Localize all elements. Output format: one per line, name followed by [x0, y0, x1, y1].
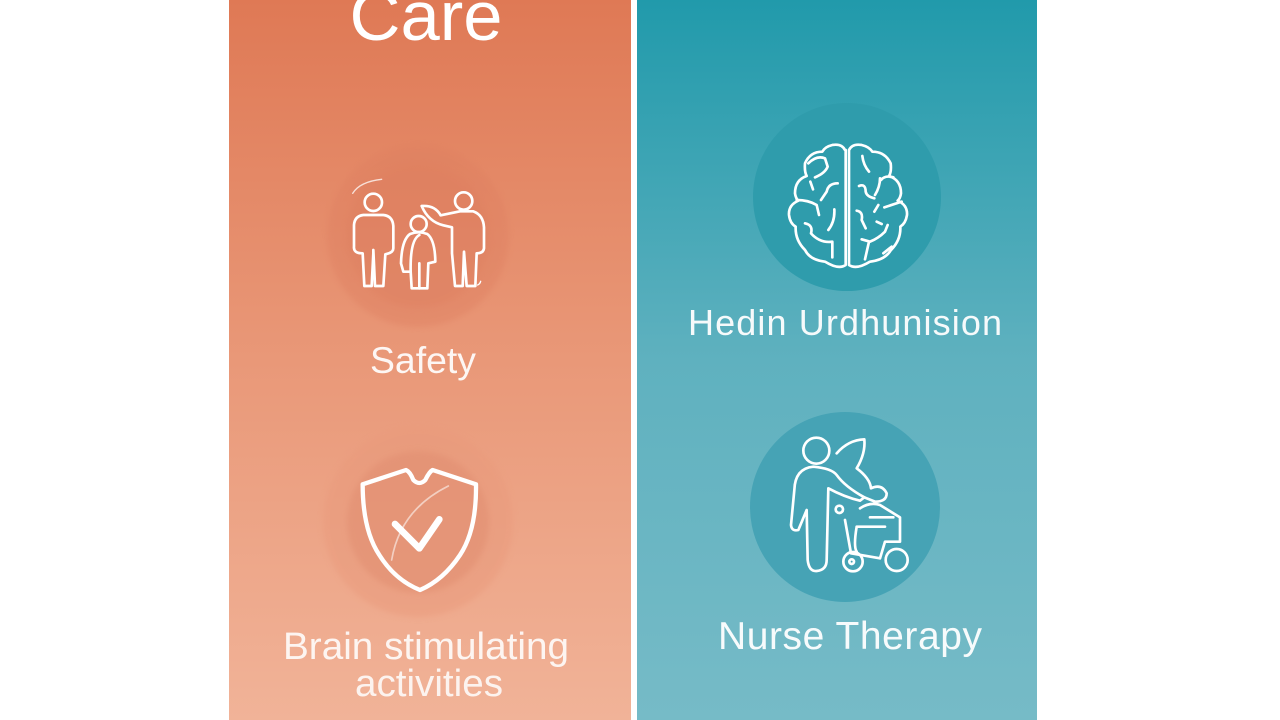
icon: family group [327, 145, 509, 327]
panel: left coral column [229, 0, 631, 720]
icon: shield with check [323, 427, 513, 617]
label: Brain stimulating activities: Brain stimulating [283, 626, 569, 668]
icon: brain [753, 103, 941, 291]
icon: nurse with wheelchair patient [750, 412, 940, 602]
panel: right teal column [637, 0, 1037, 720]
label: Medin Urdhunision: Hedin Urdhunision [688, 302, 1002, 343]
label: Safety: Safety [370, 340, 476, 381]
label: Nurse Therapy: Nurse Therapy [718, 615, 982, 658]
label: second line: activities [355, 663, 503, 705]
